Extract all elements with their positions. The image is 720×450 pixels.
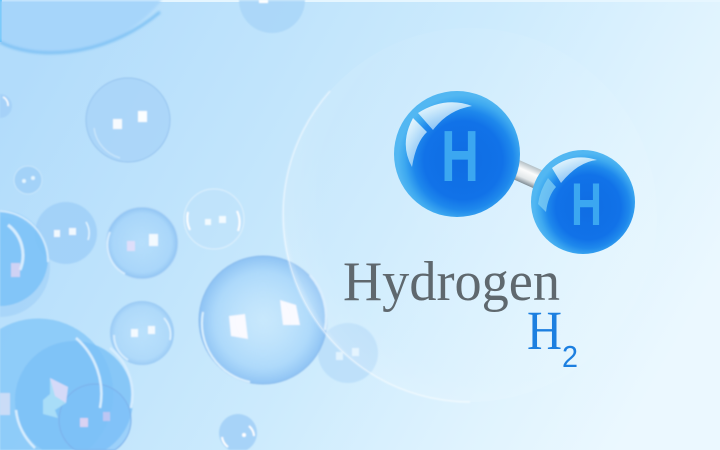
molecule: hydrogen H2 bbox=[394, 91, 635, 254]
bubble: small bottom bbox=[219, 414, 257, 450]
formula: H2: 2 bbox=[562, 339, 578, 374]
bubble: large top-left bbox=[0, 0, 162, 53]
halo sphere around molecule bbox=[283, 28, 657, 402]
bubble: pale upper-centre bbox=[184, 189, 244, 249]
title: Hydrogen: Hydrogen bbox=[343, 251, 560, 313]
molecule bond bbox=[505, 157, 565, 199]
bubble: tiny left bbox=[14, 166, 42, 194]
atom: large H bbox=[394, 91, 520, 217]
bubble: large centre bbox=[199, 256, 327, 384]
bubble: top centre bbox=[239, 0, 305, 33]
top edge highlight bbox=[0, 0, 720, 2]
bubble: behind halo right bbox=[318, 323, 378, 383]
bubble: left edge small bbox=[0, 94, 12, 118]
atom: small H bbox=[531, 150, 635, 254]
bubble: centre-lower bbox=[110, 301, 174, 365]
formula: H2: H bbox=[527, 300, 562, 361]
left edge highlight bbox=[0, 0, 2, 42]
atom: small H: H bbox=[571, 171, 602, 238]
bubble cluster: bottom-left bbox=[0, 318, 133, 450]
atom: large H: H bbox=[441, 117, 479, 197]
bubble: mid-left bbox=[35, 202, 97, 264]
formula: H2 bbox=[527, 300, 578, 374]
bubble: centre-left bbox=[106, 207, 178, 279]
bubble: left edge double bbox=[0, 210, 50, 317]
bubble: upper bbox=[86, 78, 170, 162]
